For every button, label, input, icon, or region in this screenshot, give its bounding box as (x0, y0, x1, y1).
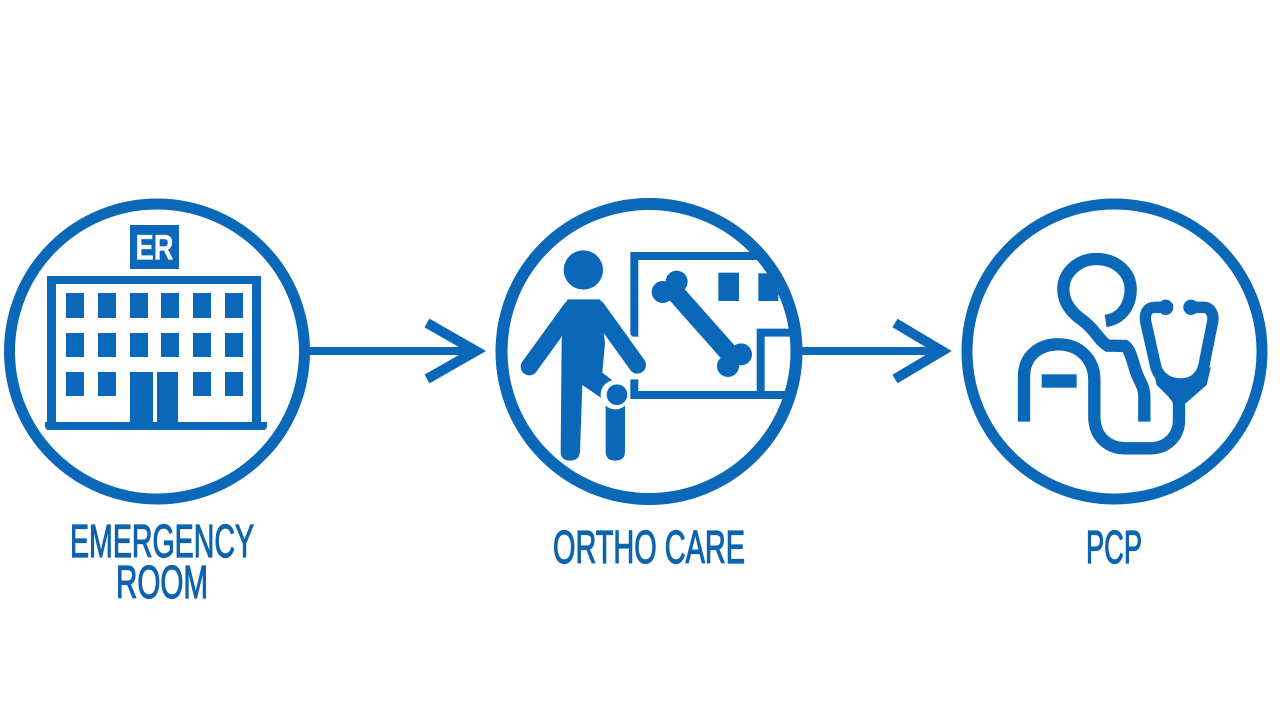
bone (652, 271, 752, 377)
stethoscope (1145, 307, 1213, 384)
label: PCP: PCP (1086, 521, 1142, 573)
badge (1042, 374, 1077, 388)
doctor head and shoulder line (1063, 259, 1144, 422)
icon: ER sign: ER (136, 228, 174, 268)
panel: emergency room (10, 204, 304, 608)
icon: hospital building (45, 276, 267, 430)
label: emergency room: ROOM (116, 556, 208, 608)
icon ring: ortho care (502, 204, 796, 499)
panel: PCP (967, 204, 1262, 573)
label: emergency room (70, 515, 254, 608)
icon ring: emergency room (10, 204, 304, 499)
icon: x-ray and injured person (529, 250, 790, 461)
panel: ortho care (502, 204, 796, 573)
person (529, 250, 637, 461)
arrow: emergency room to ortho care (308, 323, 476, 379)
label: ortho care: ORTHO CARE (553, 521, 745, 573)
x-ray frame (634, 256, 790, 395)
doctor body and stethoscope tube (1024, 344, 1179, 448)
arrow: ortho care to PCP (800, 323, 942, 379)
knee highlight (601, 380, 630, 409)
label: emergency room: EMERGENCY (70, 515, 254, 567)
icon: doctor with stethoscope (1024, 259, 1213, 448)
icon ring: PCP (967, 204, 1262, 499)
